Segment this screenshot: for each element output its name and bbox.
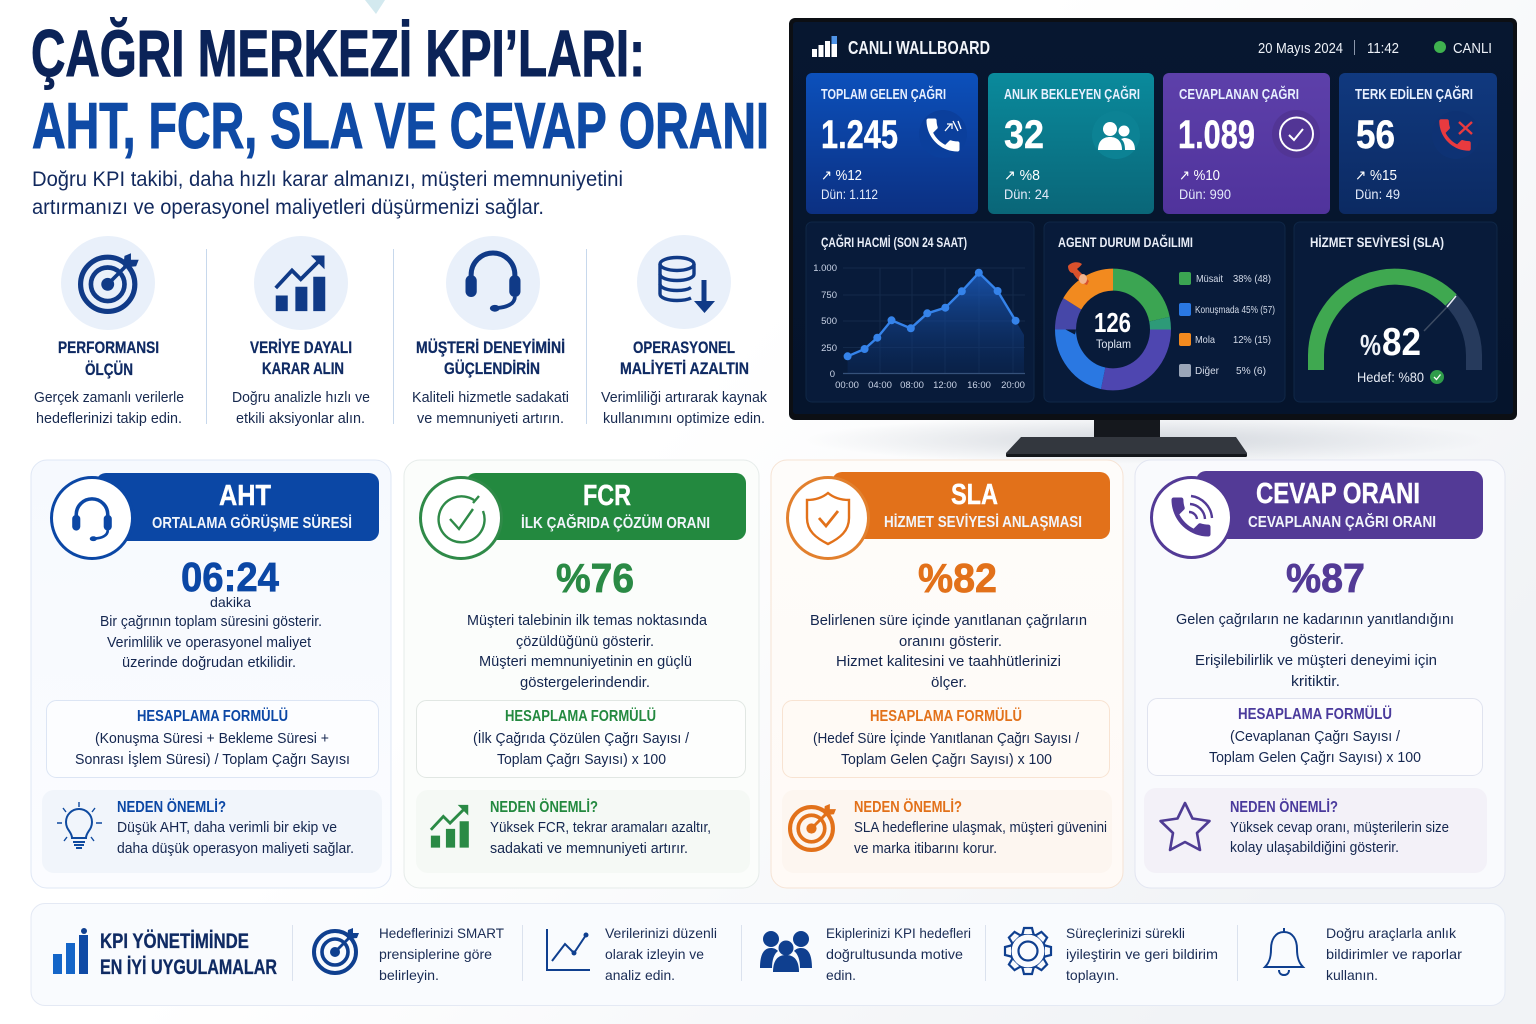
benefit: veriye dayalı karar: KARAR ALIN	[262, 359, 344, 378]
formula: HESAPLAMA FORMÜLÜ	[870, 708, 1022, 725]
panel: call volume chart: ÇAĞRI HACMİ (SON 24 SAAT)	[821, 233, 967, 250]
kpi card: terk edilen çağrı: 56	[1356, 113, 1395, 157]
best practices heading: KPI YÖNETİMİNDE	[100, 930, 249, 953]
why it matters: Yüksek FCR, tekrar aramaları azaltır,	[490, 820, 711, 836]
kpi card: anlık bekleyen çağrı: Dün: 24	[1004, 187, 1049, 202]
panel: service level gauge: HİZMET SEVİYESİ (SLA)	[1310, 234, 1444, 250]
description: üzerinde doğrudan etkilidir.	[122, 655, 296, 671]
why it matters: NEDEN ÖNEMLİ?	[490, 799, 598, 816]
benefit: müşteri deneyimi: MÜŞTERİ DENEYİMİNİ	[416, 338, 565, 357]
why it matters: sadakati ve memnuniyeti artırır.	[490, 841, 688, 857]
benefit: operasyonel maliyet: Verimliliği artırarak kaynak	[601, 390, 768, 406]
banner: AHT: AHT	[219, 480, 271, 512]
benefit: performansı ölçün: PERFORMANSI	[58, 338, 159, 357]
tip: regular analysis: Verilerinizi düzenli	[605, 925, 717, 941]
legend: 38% (48)	[1233, 273, 1271, 285]
tip: notifications: Doğru araçlarla anlık	[1326, 925, 1457, 941]
tip: smart goals	[314, 925, 504, 983]
description: çözüldüğünü gösterir.	[516, 634, 654, 650]
panel: Cevap Oranı	[1135, 460, 1505, 888]
tip: team motivation: doğrultusunda motive	[826, 946, 963, 962]
panel: agent status donut: 126	[1094, 307, 1131, 338]
description	[810, 613, 1087, 691]
banner: FCR: İLK ÇAĞRIDA ÇÖZÜM ORANI	[521, 514, 710, 532]
icon: target	[790, 804, 836, 850]
gauge	[1316, 277, 1474, 370]
banner: FCR: FCR	[583, 480, 631, 512]
tip: notifications: kullanın.	[1326, 967, 1378, 983]
formula: Toplam Gelen Çağrı Sayısı) x 100	[841, 752, 1052, 768]
panel: call volume chart: 0	[830, 369, 835, 380]
benefit: müşteri deneyimi: ve memnuniyeti artırın.	[417, 411, 564, 427]
tip: continuous improvement: Süreçlerinizi sürekli	[1066, 925, 1185, 941]
panel: FCR	[404, 460, 759, 888]
panel: AHT	[31, 460, 391, 888]
benefit: operasyonel maliyet	[601, 235, 768, 427]
tip: smart goals: Hedeflerinizi SMART	[379, 925, 504, 941]
icon: headset	[466, 253, 520, 312]
monitor	[789, 18, 1517, 457]
panel: agent status donut: Toplam	[1096, 337, 1131, 351]
kpi card: cevaplanan çağrı: ↗ %10	[1179, 168, 1220, 184]
banner: FCR	[420, 473, 746, 558]
panel: call volume chart: 1.000	[813, 263, 837, 274]
panel: call volume chart: 12:00	[933, 380, 957, 391]
benefit: veriye dayalı karar: VERİYE DAYALI	[250, 338, 352, 357]
icon: bar chart	[53, 928, 88, 974]
kpi card: toplam gelen çağrı: TOPLAM GELEN ÇAĞRI	[821, 85, 946, 103]
icon: people	[1098, 122, 1135, 150]
kpi card: toplam gelen çağrı: Dün: 1.112	[821, 187, 878, 202]
kpi card: cevaplanan çağrı: CEVAPLANAN ÇAĞRI	[1179, 85, 1299, 103]
tip: regular analysis	[547, 925, 717, 983]
kpi card: cevaplanan çağrı: 1.089	[1178, 113, 1255, 157]
icon: check circle	[1280, 118, 1313, 150]
banner: AHT: ORTALAMA GÖRÜŞME SÜRESİ	[152, 515, 352, 532]
formula: Toplam Gelen Çağrı Sayısı) x 100	[1209, 750, 1421, 766]
donut chart	[1066, 280, 1160, 379]
banner: AHT	[52, 473, 379, 558]
panel: agent status donut: AGENT DURUM DAĞILIMI	[1058, 233, 1193, 250]
wallboard header	[812, 36, 1492, 58]
benefit: müşteri deneyimi: Kaliteli hizmetle sadakati	[412, 390, 569, 406]
formula: (Konuşma Süresi + Bekleme Süresi +	[95, 731, 329, 747]
legend: Diğer	[1195, 365, 1219, 377]
benefit: performansı ölçün: ÖLÇÜN	[85, 360, 133, 379]
panel: service level gauge: 82	[1382, 321, 1421, 364]
kpi card: cevaplanan çağrı: Dün: 990	[1179, 187, 1231, 202]
formula	[782, 700, 1110, 778]
kpi card: terk edilen çağrı: ↗ %15	[1355, 168, 1397, 184]
kpi card: anlık bekleyen çağrı: ↗ %8	[1004, 168, 1040, 184]
icon: star	[1160, 803, 1210, 850]
panel: Cevap Oranı: %87	[1286, 555, 1365, 601]
icon: green check	[1430, 370, 1444, 384]
icon: rising chart	[276, 256, 325, 311]
tip: regular analysis: olarak izleyin ve	[605, 946, 704, 962]
description: Hizmet kalitesini ve taahhütlerinizi	[836, 654, 1061, 670]
kpi card: terk edilen çağrı: TERK EDİLEN ÇAĞRI	[1355, 85, 1473, 103]
title: ÇAĞRI MERKEZİ KPI’LARI:	[31, 16, 645, 90]
icon: shield check	[807, 493, 849, 544]
panel: call volume chart: 04:00	[868, 380, 892, 391]
why it matters: Yüksek cevap oranı, müşterilerin size	[1230, 820, 1449, 836]
icon: missed call	[1439, 119, 1472, 151]
tip: team motivation: Ekiplerinizi KPI hedefleri	[826, 925, 971, 941]
kpi card: terk edilen çağrı	[1339, 73, 1497, 214]
value: 06:24	[181, 554, 279, 600]
why it matters: kolay ulaşabildiğini gösterir.	[1230, 840, 1399, 856]
legend: Müsait	[1196, 273, 1223, 285]
icon: target	[81, 253, 139, 311]
panel: call volume chart: 750	[821, 290, 837, 301]
legend: Konuşmada 45% (57)	[1195, 304, 1275, 316]
icon: gear	[1005, 928, 1051, 974]
panel: SLA	[771, 460, 1123, 888]
legend: Mola	[1195, 334, 1215, 346]
monitor stand	[1006, 418, 1247, 457]
panel: service level gauge: Hedef: %80	[1357, 369, 1424, 385]
description: Gelen çağrıların ne kadarının yanıtlandığını	[1176, 612, 1454, 628]
subtitle	[32, 168, 623, 219]
icon: phone with signal	[1172, 496, 1212, 536]
kpi card: anlık bekleyen çağrı: ANLIK BEKLEYEN ÇAĞRI	[1004, 85, 1140, 103]
why it matters: NEDEN ÖNEMLİ?	[1230, 799, 1338, 816]
benefit: performansı ölçün	[34, 236, 184, 427]
description: kritiktir.	[1291, 674, 1340, 690]
icon: headset	[72, 499, 112, 541]
why it matters: daha düşük operasyon maliyeti sağlar.	[117, 841, 354, 857]
formula	[1148, 698, 1482, 776]
benefit: operasyonel maliyet: MALİYETİ AZALTIN	[620, 359, 749, 378]
why it matters	[42, 790, 382, 873]
formula: Toplam Çağrı Sayısı) x 100	[497, 752, 666, 768]
banner: Cevap Oranı	[1152, 471, 1483, 558]
why it matters	[782, 790, 1112, 873]
description: Belirlenen süre içinde yanıtlanan çağrıların	[810, 613, 1087, 629]
panel: call volume chart: 16:00	[967, 380, 991, 391]
icon: lightbulb	[57, 802, 102, 848]
benefit: performansı ölçün: hedeflerinizi takip edin.	[36, 411, 182, 427]
description	[467, 613, 708, 691]
formula: HESAPLAMA FORMÜLÜ	[1238, 706, 1392, 723]
panel: service level gauge	[1294, 222, 1497, 402]
description: ölçer.	[931, 675, 967, 691]
description: Müşteri talebinin ilk temas noktasında	[467, 613, 708, 629]
why it matters	[1144, 788, 1487, 873]
description	[1176, 612, 1454, 690]
formula	[46, 700, 378, 778]
kpi card: anlık bekleyen çağrı: 32	[1004, 113, 1044, 157]
benefit: operasyonel maliyet: kullanımını optimize edin.	[603, 411, 765, 427]
value: dakika	[210, 594, 251, 610]
benefit: veriye dayalı karar: etkili aksiyonlar alın.	[236, 411, 365, 427]
why it matters: NEDEN ÖNEMLİ?	[117, 799, 226, 816]
why it matters	[416, 790, 750, 873]
formula	[416, 700, 746, 778]
kpi card: toplam gelen çağrı: ↗ %12	[821, 168, 862, 184]
tip: continuous improvement	[1005, 925, 1218, 983]
benefit: müşteri deneyimi	[412, 236, 569, 427]
icon: check circle	[439, 496, 485, 542]
icon: coins with down arrow	[660, 258, 715, 313]
icon: rising chart	[431, 805, 469, 848]
panel: call volume chart: 250	[821, 343, 837, 354]
kpi card: cevaplanan çağrı	[1163, 73, 1330, 214]
kpi card: terk edilen çağrı: Dün: 49	[1355, 187, 1400, 202]
legend	[1179, 272, 1275, 377]
kpi card: toplam gelen çağrı: 1.245	[821, 113, 898, 157]
icon: signal bars	[812, 36, 837, 57]
panel: service level gauge: %	[1360, 330, 1381, 362]
tip: smart goals: belirleyin.	[379, 967, 439, 983]
panel: call volume chart: 500	[821, 316, 837, 327]
title: AHT, FCR, SLA VE CEVAP ORANI	[32, 89, 769, 162]
benefit: müşteri deneyimi: GÜÇLENDİRİN	[444, 359, 540, 378]
description: gösterir.	[1290, 632, 1344, 648]
best practices heading	[100, 930, 277, 979]
tip: continuous improvement: iyileştirin ve geri bildirim	[1066, 946, 1218, 962]
description: Müşteri memnuniyetinin en güçlü	[479, 654, 692, 670]
panel: SLA: %82	[918, 555, 997, 601]
banner: SLA: HİZMET SEVİYESİ ANLAŞMASI	[884, 514, 1082, 531]
wallboard header: CANLI WALLBOARD	[848, 38, 990, 58]
description: Erişilebilirlik ve müşteri deneyimi için	[1195, 653, 1437, 669]
tip: team motivation	[760, 925, 971, 983]
why it matters: SLA hedeflerine ulaşmak, müşteri güvenini	[854, 820, 1107, 836]
icon: incoming phone	[926, 118, 961, 152]
description: oranını gösterir.	[899, 634, 1002, 650]
why it matters: Düşük AHT, daha verimli bir ekip ve	[117, 820, 337, 836]
wallboard header: 11:42	[1367, 41, 1399, 57]
best practices heading: EN İYİ UYGULAMALAR	[100, 956, 277, 979]
tip: notifications: bildirimler ve raporlar	[1326, 946, 1462, 962]
kpi card: anlık bekleyen çağrı	[988, 73, 1154, 214]
legend: 5% (6)	[1236, 365, 1266, 377]
panel: call volume chart: 20:00	[1001, 380, 1025, 391]
banner: Cevap Oranı: CEVAP ORANI	[1256, 478, 1420, 510]
panel: call volume chart: 00:00	[835, 380, 859, 391]
formula: HESAPLAMA FORMÜLÜ	[137, 708, 288, 725]
formula: (İlk Çağrıda Çözülen Çağrı Sayısı /	[473, 729, 690, 747]
banner: SLA	[788, 472, 1110, 558]
description: Verimlilik ve operasyonel maliyet	[107, 635, 311, 651]
panel: call volume chart	[806, 222, 1034, 402]
formula: (Cevaplanan Çağrı Sayısı /	[1230, 729, 1401, 745]
description: göstergelerindendir.	[520, 675, 650, 691]
banner: Cevap Oranı: CEVAPLANAN ÇAĞRI ORANI	[1248, 513, 1436, 531]
benefit: veriye dayalı karar	[232, 236, 370, 427]
tip: smart goals: prensiplerine göre	[379, 946, 492, 962]
formula: (Hedef Süre İçinde Yanıtlanan Çağrı Sayısı /	[813, 729, 1080, 747]
tip: continuous improvement: toplayın.	[1066, 967, 1119, 983]
why it matters: ve marka itibarını korur.	[854, 841, 997, 857]
panel: call volume chart: 08:00	[900, 380, 924, 391]
wallboard header: CANLI	[1453, 41, 1492, 57]
why it matters: NEDEN ÖNEMLİ?	[854, 799, 962, 816]
benefit: operasyonel maliyet: OPERASYONEL	[633, 338, 735, 357]
orange-red marker	[1068, 262, 1089, 285]
panel: agent status donut	[1044, 222, 1285, 402]
wallboard header: 20 Mayıs 2024	[1258, 41, 1343, 57]
formula: HESAPLAMA FORMÜLÜ	[505, 708, 656, 725]
subtitle: artırmanızı ve operasyonel maliyetleri düşürmenizi sağlar.	[32, 196, 544, 219]
benefit: veriye dayalı karar: Doğru analizle hızlı ve	[232, 390, 370, 406]
description	[100, 614, 322, 671]
panel: best practices	[31, 904, 1505, 1006]
tip: team motivation: edin.	[826, 967, 856, 983]
subtitle: Doğru KPI takibi, daha hızlı karar almanızı, müşteri memnuniyetini	[32, 168, 623, 191]
formula: Sonrası İşlem Süresi) / Toplam Çağrı Sayısı	[75, 750, 350, 768]
tip: regular analysis: analiz edin.	[605, 967, 675, 983]
description: Bir çağrının toplam süresini gösterir.	[100, 614, 322, 630]
legend: 12% (15)	[1233, 334, 1271, 346]
title	[31, 16, 769, 162]
kpi card: toplam gelen çağrı	[806, 73, 978, 214]
benefit: performansı ölçün: Gerçek zamanlı verilerle	[34, 390, 184, 406]
panel: FCR: %76	[556, 555, 634, 601]
banner: SLA: SLA	[951, 479, 998, 511]
tip: notifications	[1265, 925, 1462, 983]
